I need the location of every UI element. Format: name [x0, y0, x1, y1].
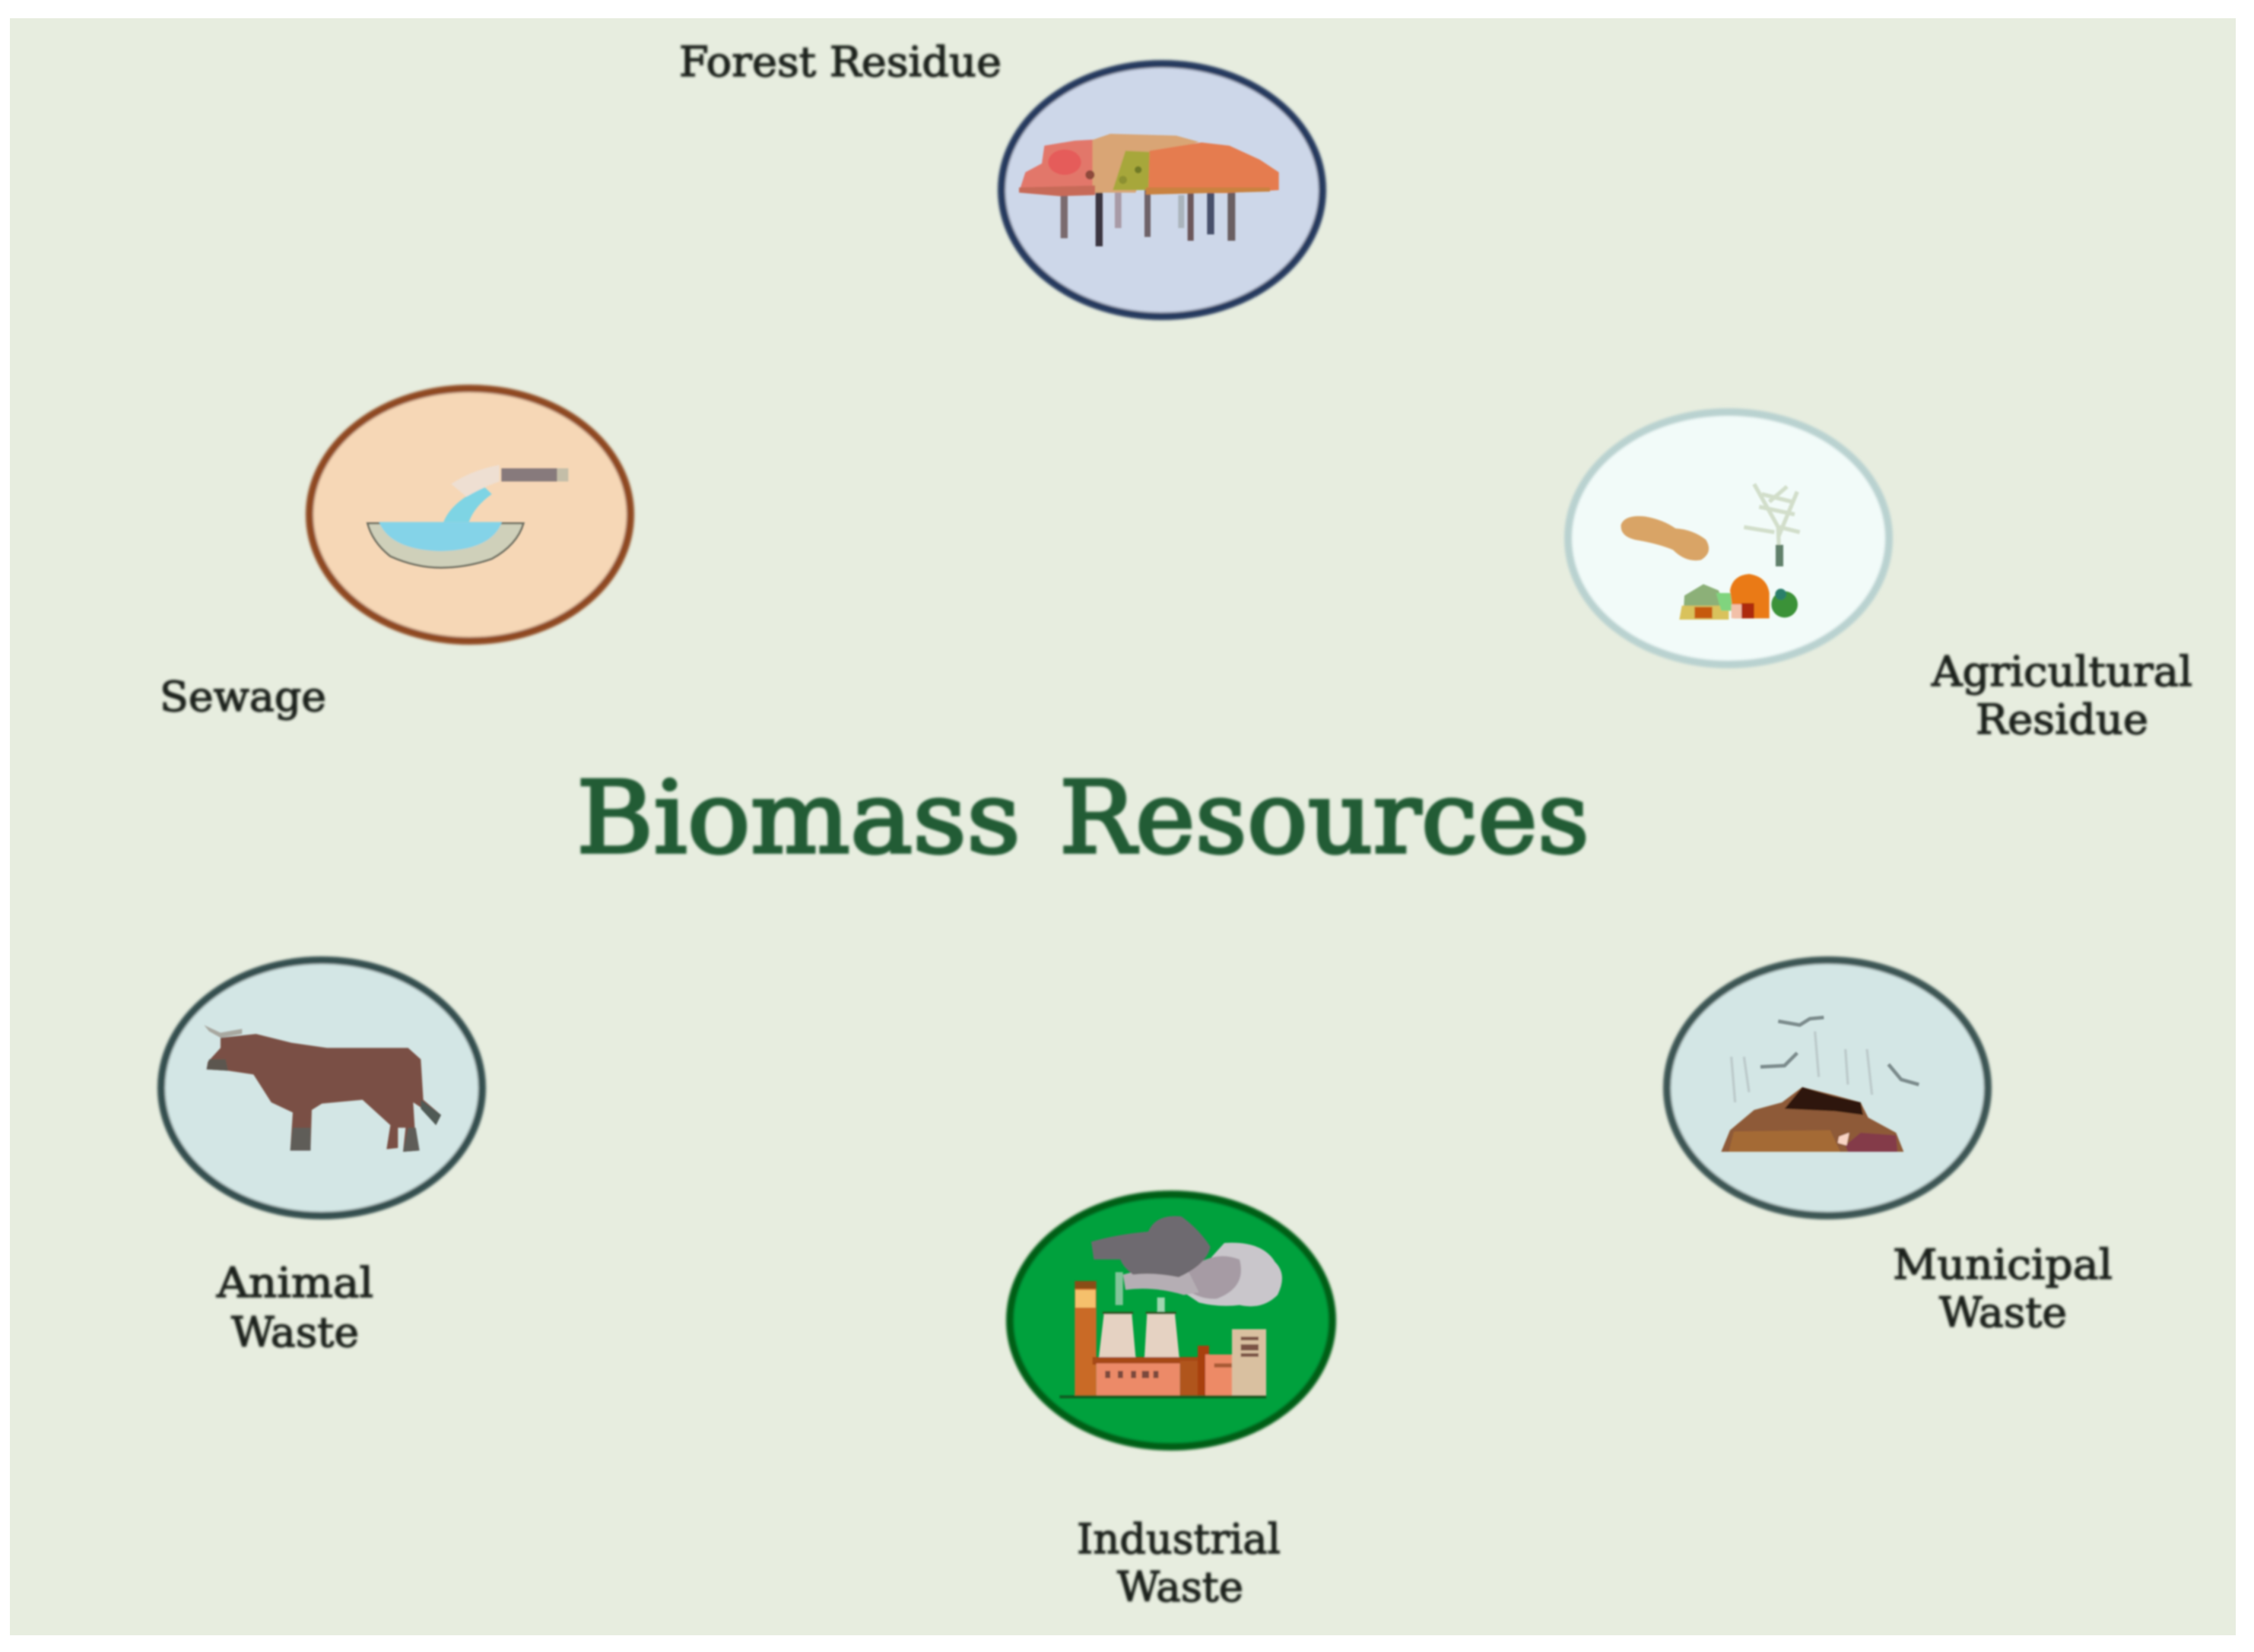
label: sewage: Sewage: [160, 673, 326, 721]
panel: sewage: [310, 388, 630, 641]
title: [576, 759, 1589, 876]
panel: agricultural residue: [1568, 412, 1889, 664]
title: Biomass: [576, 759, 1021, 876]
label: industrial waste: Waste: [1117, 1563, 1243, 1611]
label: agricultural residue: Residue: [1976, 696, 2148, 744]
label: animal waste: Waste: [231, 1308, 359, 1356]
circle: forest residue: [1002, 64, 1322, 316]
circle: agricultural residue: [1568, 412, 1889, 664]
icon: waste heap with birds: [1721, 1017, 1919, 1152]
panel: municipal waste: [1667, 960, 1988, 1216]
label: municipal waste: Waste: [1939, 1289, 2067, 1337]
label: agricultural residue: Agricultural: [1931, 648, 2192, 696]
icon: cow: [204, 1025, 441, 1152]
label: municipal waste: [1893, 1241, 2113, 1337]
icon: forest trees: [1019, 134, 1279, 246]
circle: municipal waste: [1667, 960, 1988, 1216]
label: forest residue: Forest Residue: [679, 38, 1002, 86]
title: Resources: [1059, 759, 1589, 876]
label: industrial waste: [1077, 1515, 1281, 1611]
circle: sewage: [310, 388, 630, 641]
icon: sewage pipe and basin: [367, 465, 568, 568]
icon: factory with smoke: [1059, 1216, 1282, 1398]
panel: forest residue: [1002, 64, 1322, 316]
label: animal waste: Animal: [216, 1259, 373, 1307]
label: animal waste: [216, 1259, 373, 1356]
label: agricultural residue: [1931, 648, 2192, 744]
circle: animal waste: [161, 960, 482, 1216]
label: industrial waste: Industrial: [1077, 1515, 1281, 1563]
icon: crops and vegetables: [1621, 484, 1800, 620]
label: municipal waste: Municipal: [1893, 1241, 2113, 1289]
panel: industrial waste: [1010, 1194, 1332, 1447]
panel: animal waste: [161, 960, 482, 1216]
circle: industrial waste: [1010, 1194, 1332, 1447]
